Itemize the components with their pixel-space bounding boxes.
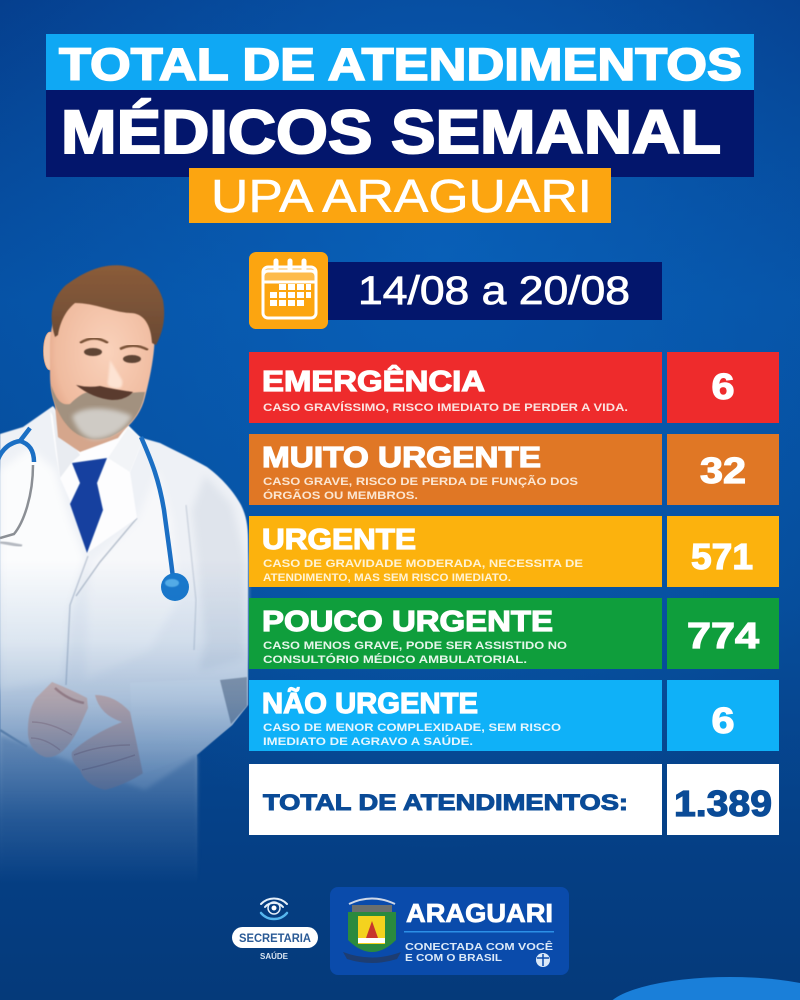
coat shading — [0, 448, 85, 690]
cuff — [132, 709, 244, 773]
logo: araguari: E COM O BRASIL — [405, 953, 502, 964]
row: urgente — [249, 516, 779, 587]
decorative corner wave — [605, 977, 800, 1000]
title line 2 — [46, 90, 754, 177]
row: muito urgente: MUITO URGENTE — [262, 442, 541, 474]
row: nao urgente: IMEDIATO DE AGRAVO A SAÚDE. — [263, 735, 473, 748]
smile — [76, 385, 133, 400]
shirt collar — [50, 412, 143, 553]
hand: left — [28, 682, 88, 757]
stethoscope — [141, 437, 173, 578]
row: nao urgente: CASO DE MENOR COMPLEXIDADE, SEM RISCO — [263, 722, 562, 734]
lapel lines — [66, 556, 88, 685]
row: total — [249, 764, 779, 835]
doctor illustration — [0, 265, 248, 900]
coat — [0, 406, 248, 900]
row: emergencia: CASO GRAVÍSSIMO, RISCO IMEDIATO DE PERDER A VIDA. — [263, 401, 628, 414]
row: emergencia — [249, 352, 779, 423]
logo: araguari: ARAGUARI — [406, 898, 553, 928]
table of triage categories — [249, 352, 779, 835]
icon: signal — [261, 898, 287, 919]
row: emergencia: 6 — [712, 366, 734, 407]
title line 1: TOTAL DE ATENDIMENTOS — [59, 39, 742, 90]
eyes — [84, 348, 102, 356]
row: pouco urgente: POUCO URGENTE — [262, 606, 553, 638]
logo: araguari — [330, 887, 569, 975]
row: emergencia: EMERGÊNCIA — [262, 364, 485, 398]
row: pouco urgente — [249, 598, 779, 669]
title line 3: UPA ARAGUARI — [211, 170, 592, 222]
hair — [52, 265, 164, 345]
row: total: 1.389 — [674, 783, 772, 824]
neck — [54, 402, 128, 452]
logo: secretaria de saude: SECRETARIA — [239, 931, 311, 945]
row: total: TOTAL DE ATENDIMENTOS: — [263, 790, 628, 815]
tie — [70, 458, 107, 553]
row: pouco urgente: CASO MENOS GRAVE, PODE SER ASSISTIDO NO — [263, 640, 568, 652]
row: nao urgente — [249, 680, 779, 751]
nose — [108, 360, 122, 388]
logo: araguari: CONECTADA COM VOCÊ — [405, 940, 553, 953]
row: pouco urgente: 774 — [687, 615, 759, 656]
row: nao urgente: 6 — [712, 700, 734, 741]
date band — [328, 262, 662, 320]
icon: calendar — [249, 252, 328, 329]
row: urgente: URGENTE — [262, 524, 416, 556]
row: nao urgente: NÃO URGENTE — [262, 686, 478, 720]
row: muito urgente: 32 — [700, 450, 746, 491]
hand: right — [72, 695, 145, 790]
ear — [43, 332, 52, 370]
face — [49, 302, 156, 430]
date text: 14/08 a 20/08 — [358, 269, 630, 313]
title line 2: MÉDICOS SEMANAL — [61, 98, 721, 166]
logo: secretaria de saude: SAÚDE — [260, 952, 289, 961]
icon: small seal — [536, 953, 550, 967]
logo: secretaria de saude — [232, 898, 318, 961]
beard — [51, 385, 145, 439]
row: pouco urgente: CONSULTÓRIO MÉDICO AMBULATORIAL. — [263, 653, 527, 666]
between-hands shading — [0, 735, 200, 836]
row: urgente: 571 — [691, 536, 753, 577]
crest — [343, 898, 401, 963]
row: muito urgente: CASO GRAVE, RISCO DE PERDA DE FUNÇÃO DOS — [263, 475, 578, 488]
row: urgente: ATENDIMENTO, MAS SEM RISCO IMEDIATO. — [263, 572, 511, 584]
row: muito urgente — [249, 434, 779, 505]
row: urgente: CASO DE GRAVIDADE MODERADA, NECESSITA DE — [263, 558, 583, 570]
title banner — [46, 34, 754, 223]
row: muito urgente: ÓRGÃOS OU MEMBROS. — [263, 489, 418, 502]
